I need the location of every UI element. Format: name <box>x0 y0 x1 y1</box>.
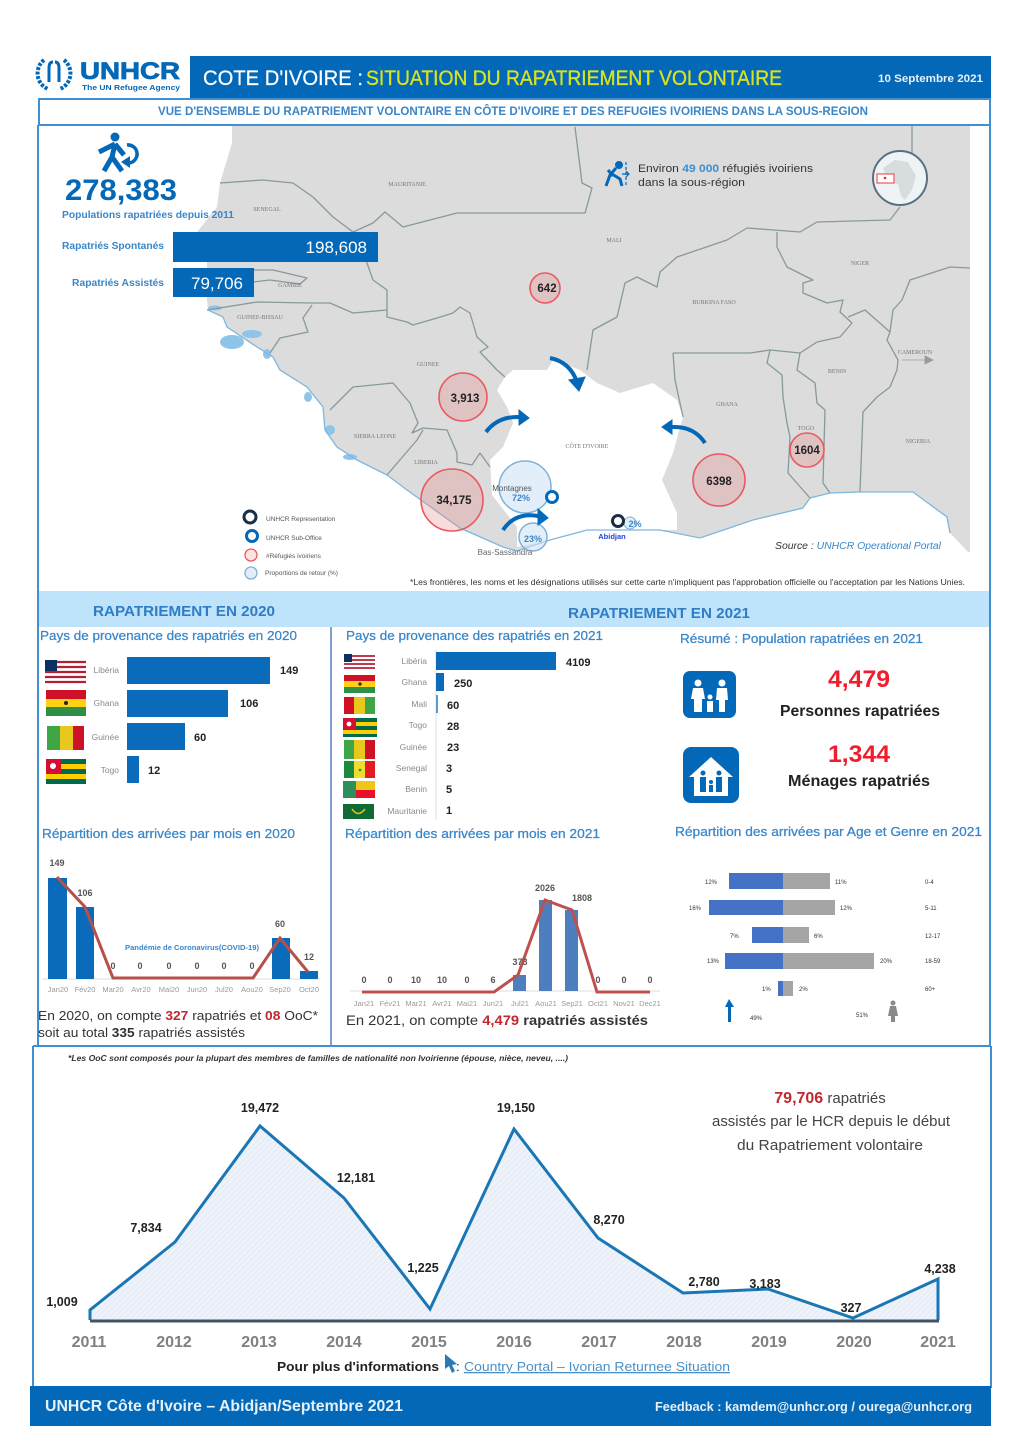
section headings band <box>37 591 990 627</box>
callout: refugees in sub-region: dans la sous-région <box>638 177 745 189</box>
chart: age and gender pyramid: 12% <box>840 906 853 912</box>
title banner: 10 Septembre 2021 <box>878 73 983 85</box>
panel: summary 2021 <box>675 631 982 1022</box>
chart: monthly arrivals 2020: Jul20 <box>215 985 233 994</box>
heading: age and gender: Répartition des arrivées par Age et Genre en 2021 <box>675 824 982 839</box>
chart: monthly arrivals 2021: Mar21 <box>405 999 427 1008</box>
chart: assisted returns 2011-2021: 2021 <box>920 1334 956 1351</box>
chart: monthly arrivals 2021: 10 <box>437 975 447 985</box>
heading: monthly arrivals 2021: Répartition des arrivées par mois en 2021 <box>345 826 600 841</box>
country labels: GUINEE-BISSAU <box>237 315 283 321</box>
bar: spontaneous returnees: Rapatriés Spontanés <box>62 241 164 252</box>
flag: Guinea <box>47 726 84 750</box>
chart: assisted returns 2011-2021: 2015 <box>411 1334 447 1351</box>
key figure: total returnees <box>62 174 234 221</box>
stat: households returned <box>788 741 930 790</box>
country labels: SENEGAL <box>253 207 281 213</box>
subtitle strip <box>39 99 990 125</box>
icon: household <box>683 747 739 803</box>
estuaries and islands <box>208 306 357 460</box>
more information link: : <box>456 1359 460 1374</box>
callout: total assisted: 79,706 rapatriés <box>774 1090 886 1107</box>
flag: Liberia <box>45 660 86 685</box>
chart: monthly arrivals 2021: 2026 <box>535 883 555 893</box>
key figure: total returnees: 278,383 <box>65 174 177 207</box>
more information link: Pour plus d'informations <box>277 1359 439 1374</box>
bar chart: origin 2021: 250 <box>454 678 472 690</box>
chart: age and gender pyramid: 12-17 <box>925 934 941 940</box>
panel: map <box>62 126 970 587</box>
flag: Togo <box>46 759 86 784</box>
inset locator map <box>873 151 927 205</box>
chart: assisted returns 2011-2021: 2011 <box>72 1334 106 1351</box>
chart: monthly arrivals 2021: Dec21 <box>639 999 661 1008</box>
callout: total assisted: du Rapatriement volontaire <box>737 1137 923 1154</box>
stat: persons returned <box>780 666 940 720</box>
legend: UNHCR Representation <box>266 516 336 523</box>
footer: Feedback : kamdem@unhcr.org / ourega@unhcr.org <box>655 1399 972 1414</box>
more information link: Country Portal – Ivorian Returnee Situation <box>464 1359 730 1374</box>
chart: assisted returns 2011-2021: 2017 <box>581 1334 617 1351</box>
chart: monthly arrivals 2021: Mai21 <box>457 999 477 1008</box>
chart: age and gender pyramid: 18-59 <box>925 959 941 965</box>
legend <box>244 511 338 579</box>
chart: monthly arrivals 2021: Aou21 <box>535 999 557 1008</box>
return arrows <box>486 358 705 530</box>
country labels: MAURITANIE <box>388 182 426 188</box>
chart: age and gender pyramid: 13% <box>707 959 720 965</box>
stat: persons returned: Personnes rapatriées <box>780 703 940 720</box>
country labels <box>237 182 933 466</box>
flag: Togo <box>343 718 377 737</box>
flag: Mauritania <box>343 804 374 819</box>
chart: age and gender pyramid: 1% <box>762 987 771 993</box>
UNHCR office markers <box>546 492 624 526</box>
map disclaimer: *Les frontières, les noms et les désignations utilisés sur cette carte n'impliquent pas l'approbation officielle ou l'acceptation par les Nations Unies. <box>410 578 965 587</box>
chart: monthly arrivals 2021: 0 <box>387 975 393 985</box>
chart: assisted returns 2011-2021: 2014 <box>326 1334 362 1351</box>
refugee counts: 3,913 <box>451 393 479 405</box>
bar chart: origin 2021: 4109 <box>566 657 590 669</box>
chart: monthly arrivals 2020: 60 <box>275 919 285 929</box>
chart: age and gender pyramid: 0-4 <box>925 880 934 886</box>
bar: spontaneous returnees <box>62 232 378 262</box>
chart: age and gender pyramid: 5-11 <box>925 906 937 912</box>
chart: age and gender pyramid: 12% <box>705 880 718 886</box>
land mass <box>197 126 970 552</box>
country labels: BURKINA FASO <box>692 300 736 306</box>
callout: total assisted: assistés par le HCR depuis le début <box>712 1113 951 1130</box>
flag: Senegal <box>344 761 375 778</box>
country labels: BENIN <box>828 369 847 375</box>
chart: assisted returns 2011-2021: 2018 <box>666 1334 702 1351</box>
chart: monthly arrivals 2021: 0 <box>621 975 627 985</box>
frame lines <box>38 125 990 1046</box>
chart: monthly arrivals 2020: Fév20 <box>75 985 95 994</box>
bar: assisted returnees: Rapatriés Assistés <box>72 278 164 289</box>
country labels: GUINEE <box>417 362 439 368</box>
chart: assisted returns 2011-2021: 7,834 <box>130 1221 162 1235</box>
chart: assisted returns 2011-2021: 2016 <box>496 1334 532 1351</box>
more information link <box>277 1354 730 1374</box>
chart: assisted returns 2011-2021: 8,270 <box>593 1213 625 1227</box>
legend: UNHCR Sub-Office <box>266 535 322 542</box>
bar chart: origin 2020 <box>45 657 298 784</box>
chart: age and gender pyramid: 60+ <box>925 987 936 993</box>
blue return circles: Bas-Sassandra <box>478 548 533 557</box>
stat: households returned: Ménages rapatriés <box>788 773 930 790</box>
chart: assisted returns 2011-2021: 2,780 <box>688 1275 720 1289</box>
chart: monthly arrivals 2020: 0 <box>137 961 143 971</box>
heading: origin 2020: Pays de provenance des rapatriés en 2020 <box>40 628 297 643</box>
bar chart: origin 2021: Libéria <box>401 656 427 666</box>
panel: repatriation 2021 <box>343 628 661 1028</box>
bar chart: origin 2021: Guinée <box>400 742 427 752</box>
refugee counts: 6398 <box>706 476 732 488</box>
bar: assisted returnees: 79,706 <box>191 274 243 293</box>
country labels: CÔTE D'IVOIRE <box>566 442 609 450</box>
bar chart: origin 2020: 149 <box>280 665 298 677</box>
flag: Liberia <box>344 654 375 672</box>
country labels: NIGERIA <box>906 439 931 445</box>
chart: age and gender pyramid: 7% <box>730 934 739 940</box>
bar chart: origin 2021: 23 <box>447 742 459 754</box>
bar chart: origin 2021: 5 <box>446 784 452 796</box>
chart: age and gender pyramid: 6% <box>814 934 823 940</box>
chart: monthly arrivals 2021: Jun21 <box>483 999 503 1008</box>
heading: origin 2021: Pays de provenance des rapatriés en 2021 <box>346 628 603 643</box>
refugee counts <box>436 283 820 507</box>
summary text 2020 <box>38 1008 318 1040</box>
chart: assisted returns 2011-2021: 12,181 <box>337 1171 375 1185</box>
blue return circles: 72% <box>512 493 530 503</box>
chart: monthly arrivals 2020: 0 <box>249 961 255 971</box>
chart: monthly arrivals 2020: Jun20 <box>187 985 207 994</box>
title banner: SITUATION DU RAPATRIEMENT VOLONTAIRE <box>366 67 782 90</box>
panel: repatriation 2020 <box>38 628 320 1040</box>
bar chart: origin 2020: Libéria <box>93 665 119 675</box>
chart: assisted returns 2011-2021: 4,238 <box>924 1262 956 1276</box>
borders <box>207 126 970 498</box>
bar chart: origin 2021: Senegal <box>396 763 427 773</box>
icon: returning person <box>99 132 137 171</box>
country labels: NIGER <box>851 261 869 267</box>
key figure: total returnees: Populations rapatriées depuis 2011 <box>62 210 234 221</box>
chart: assisted returns 2011-2021: 327 <box>841 1301 861 1315</box>
blue return circles <box>478 461 642 557</box>
country labels: TOGO <box>798 426 815 432</box>
country labels: GHANA <box>716 402 738 408</box>
chart: age and gender pyramid: 51% <box>856 1013 869 1019</box>
callout: refugees in sub-region <box>606 162 814 189</box>
summary text 2021: En 2021, on compte 4,479 rapatriés assistés <box>346 1012 648 1028</box>
icon: refugee <box>606 162 629 187</box>
title banner <box>190 56 991 98</box>
chart: monthly arrivals 2020: 0 <box>194 961 200 971</box>
arrow: Cameroun direction <box>902 356 933 364</box>
refugee counts: 642 <box>537 283 557 295</box>
footer: UNHCR Côte d'Ivoire – Abidjan/Septembre 2021 <box>45 1398 403 1415</box>
chart: monthly arrivals 2021: 6 <box>490 975 496 985</box>
chart: monthly arrivals 2020 <box>42 858 320 994</box>
callout: refugees in sub-region: Environ 49 000 réfugiés ivoiriens <box>638 163 814 175</box>
flag: Mali <box>344 697 375 714</box>
flag: Ghana <box>344 675 375 693</box>
icon: male <box>725 999 734 1022</box>
heading: monthly arrivals 2020: Répartition des arrivées par mois en 2020 <box>42 826 295 841</box>
chart: age and gender pyramid: 11% <box>835 880 847 886</box>
chart: age and gender pyramid: 49% <box>750 1016 763 1022</box>
chart: monthly arrivals 2020: Aou20 <box>241 985 263 994</box>
chart: monthly arrivals 2020: Avr20 <box>131 985 151 994</box>
chart: monthly arrivals 2021: 0 <box>464 975 470 985</box>
bar chart: origin 2021: 28 <box>447 721 459 733</box>
icon: family <box>683 671 736 718</box>
chart: assisted returns 2011-2021: 1,225 <box>407 1261 439 1275</box>
country labels: GAMBIE <box>278 283 302 289</box>
coast line <box>208 310 950 551</box>
chart: monthly arrivals 2020: 12 <box>304 952 314 962</box>
logo: UNHCR: The UN Refugee Agency <box>82 83 181 92</box>
country labels: LIBERIA <box>414 460 438 466</box>
stat: households returned: 1,344 <box>828 741 891 768</box>
flag: Ghana <box>46 690 86 716</box>
bar chart: origin 2021: 1 <box>446 805 452 817</box>
bar chart: origin 2020: 106 <box>240 698 258 710</box>
bar chart: origin 2021: Ghana <box>401 677 427 687</box>
chart: monthly arrivals 2021: Avr21 <box>432 999 452 1008</box>
chart: monthly arrivals 2021: Jan21 <box>354 999 374 1008</box>
icon: cursor <box>445 1354 457 1373</box>
chart: monthly arrivals 2020: 149 <box>49 858 65 868</box>
chart: monthly arrivals 2021: Fév21 <box>380 999 400 1008</box>
chart: monthly arrivals 2021: 0 <box>647 975 653 985</box>
chart: assisted returns 2011-2021: 3,183 <box>749 1277 781 1291</box>
refugee circles <box>421 273 824 531</box>
bar chart: origin 2020: Ghana <box>93 698 119 708</box>
chart: monthly arrivals 2020: 0 <box>166 961 172 971</box>
blue return circles: 23% <box>524 534 542 544</box>
bar chart: origin 2021: Togo <box>409 720 427 730</box>
bar: assisted returnees <box>72 268 254 297</box>
country labels: SIERRA LEONE <box>354 434 396 440</box>
chart: age and gender pyramid: 20% <box>880 959 893 965</box>
bar chart: origin 2021: 60 <box>447 700 459 712</box>
chart: monthly arrivals 2021: 1808 <box>572 893 592 903</box>
section headings band: RAPATRIEMENT EN 2020 <box>93 603 275 620</box>
blue return circles: Montagnes <box>492 484 532 493</box>
refugee counts: 34,175 <box>436 495 472 507</box>
chart: monthly arrivals 2020: 0 <box>221 961 227 971</box>
chart: monthly arrivals 2020: Jan20 <box>48 985 68 994</box>
chart: assisted returns 2011-2021: 2019 <box>751 1334 787 1351</box>
section headings band: RAPATRIEMENT EN 2021 <box>568 605 750 622</box>
summary text 2020: soit au total 335 rapatriés assistés <box>38 1025 246 1040</box>
chart: monthly arrivals 2020: Mai20 <box>159 985 179 994</box>
chart: monthly arrivals 2021: Jul21 <box>511 999 529 1008</box>
bar chart: origin 2020: 60 <box>194 732 206 744</box>
flag: Benin <box>343 781 375 798</box>
logo: UNHCR: UNHCR <box>80 58 180 85</box>
bar chart: origin 2020: Togo <box>101 765 119 775</box>
chart: monthly arrivals 2020: 106 <box>77 888 93 898</box>
flag: Guinea <box>344 740 375 759</box>
refugee counts: 1604 <box>794 445 820 457</box>
bar chart: origin 2021: 3 <box>446 763 452 775</box>
country labels: CAMEROUN <box>898 350 933 356</box>
chart: assisted returns 2011-2021: 2012 <box>156 1334 192 1351</box>
chart: monthly arrivals 2020: Pandémie de Coronavirus(COVID-19) <box>125 943 259 952</box>
chart: monthly arrivals 2021: Oct21 <box>588 999 608 1008</box>
map source: Source : UNHCR Operational Portal <box>775 541 942 552</box>
blue return circles: Abidjan <box>598 532 626 541</box>
bar chart: origin 2021: Mali <box>411 699 427 709</box>
chart: monthly arrivals 2021 <box>350 883 661 1008</box>
chart: assisted returns 2011-2021: 2013 <box>241 1334 277 1351</box>
country labels: MALI <box>606 238 622 244</box>
callout: total assisted <box>712 1090 951 1154</box>
chart: monthly arrivals 2020: Oct20 <box>299 985 319 994</box>
icon: female <box>888 1000 898 1022</box>
logo: UNHCR <box>38 58 181 92</box>
icon: wreath <box>38 60 70 89</box>
title banner: COTE D'IVOIRE : <box>203 67 363 90</box>
blue return circles: 2% <box>628 519 642 529</box>
footnote: OoC: *Les OoC sont composés pour la plupart des membres de familles de nationalité non Ivoirienne (épouse, nièce, neveu, ....) <box>68 1054 568 1063</box>
chart: assisted returns 2011-2021: 19,472 <box>241 1101 279 1115</box>
chart: monthly arrivals 2020: Sep20 <box>269 985 291 994</box>
chart: age and gender pyramid: 2% <box>799 987 808 993</box>
bar chart: origin 2021: Mauritanie <box>387 806 427 816</box>
summary text 2020: En 2020, on compte 327 rapatriés et 08 OoC* <box>38 1008 318 1023</box>
chart: monthly arrivals 2021: Sep21 <box>561 999 583 1008</box>
chart: assisted returns 2011-2021: 19,150 <box>497 1101 535 1115</box>
bar chart: origin 2020: Guinée <box>92 732 119 742</box>
chart: age and gender pyramid: 16% <box>689 906 702 912</box>
legend: #Réfugiés ivoiriens <box>266 553 322 560</box>
subtitle strip: VUE D'ENSEMBLE DU RAPATRIEMENT VOLONTAIRE EN CÔTE D'IVOIRE ET DES REFUGIES IVOIRIENS DANS LA SOUS-REGION <box>158 103 868 118</box>
chart: monthly arrivals 2021: 0 <box>361 975 367 985</box>
bar chart: origin 2021 <box>343 650 590 820</box>
chart: monthly arrivals 2020: 0 <box>110 961 116 971</box>
chart: assisted returns 2011-2021: 2020 <box>836 1334 872 1351</box>
chart: age and gender pyramid <box>689 873 941 1022</box>
chart: monthly arrivals 2020: Mar20 <box>102 985 124 994</box>
bar chart: origin 2021: Benin <box>405 784 427 794</box>
bar: spontaneous returnees: 198,608 <box>306 238 367 257</box>
heading: summary: Résumé : Population rapatriées en 2021 <box>680 631 923 646</box>
chart: monthly arrivals 2021: 0 <box>595 975 601 985</box>
bar chart: origin 2020: 12 <box>148 765 160 777</box>
stat: persons returned: 4,479 <box>828 666 890 693</box>
chart: monthly arrivals 2021: Nov21 <box>613 999 635 1008</box>
Côte d'Ivoire <box>490 360 683 547</box>
legend: Proportions de retour (%) <box>265 570 338 577</box>
chart: monthly arrivals 2021: 10 <box>411 975 421 985</box>
chart: assisted returns 2011-2021 <box>46 1101 956 1351</box>
chart: assisted returns 2011-2021: 1,009 <box>46 1295 78 1309</box>
chart: monthly arrivals 2021: 373 <box>512 957 528 967</box>
footer <box>30 1386 991 1426</box>
